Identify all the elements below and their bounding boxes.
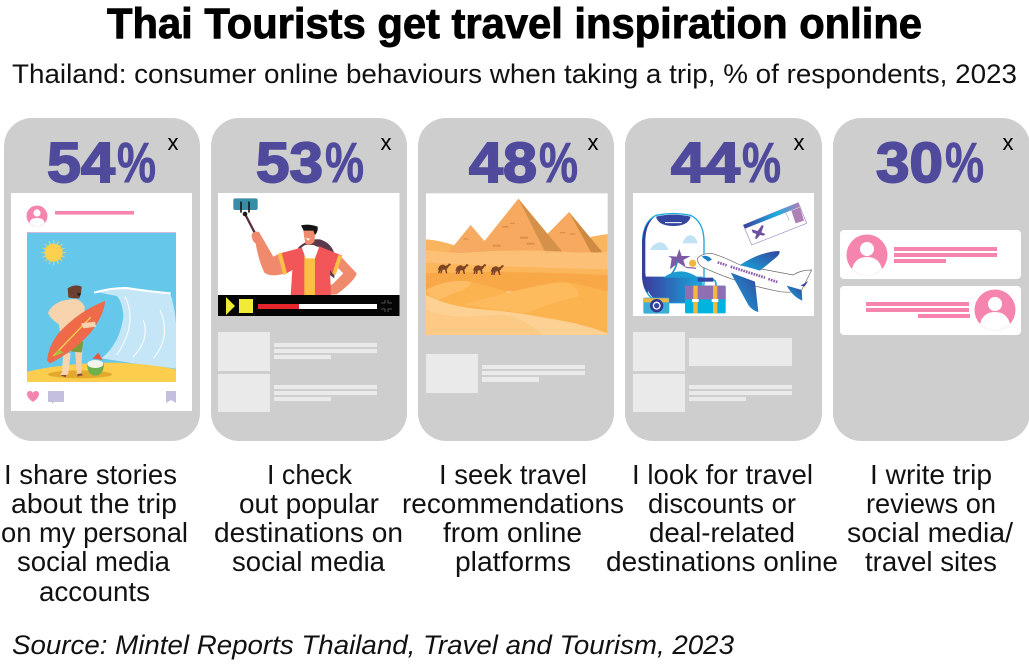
caption: share stories: I share stories xyxy=(4,459,177,490)
panel: trip reviews (30%) xyxy=(833,118,1029,441)
caption: trip reviews xyxy=(847,459,1013,577)
social post card xyxy=(11,193,192,411)
plane ticket xyxy=(743,203,807,245)
selfie traveller xyxy=(233,198,357,295)
desert pyramid image xyxy=(426,193,608,335)
caption: share stories: accounts xyxy=(39,576,150,607)
post action icons xyxy=(27,391,176,404)
caption: trip reviews: social media/ xyxy=(847,517,1013,548)
caption: travel discounts: discounts or xyxy=(648,488,796,519)
stat: 44%: 44 xyxy=(671,131,740,195)
panel: travel recommendations (48%) xyxy=(418,118,614,441)
suitcase xyxy=(685,278,726,313)
multiplier mark: x xyxy=(794,130,804,155)
subtitle: Thailand: consumer online behaviours when taking a trip, % of respondents, 2023 xyxy=(12,59,1017,89)
caption: travel recommendations xyxy=(402,459,624,577)
stat: 30%: 30 xyxy=(876,131,943,195)
stat: 44%: % xyxy=(742,131,781,195)
caption: share stories: about the trip xyxy=(11,488,177,519)
caption: travel discounts: deal-related xyxy=(649,517,795,548)
caption: travel recommendations: from online xyxy=(443,517,582,548)
caption: trip reviews: travel sites xyxy=(865,546,997,577)
placeholder list xyxy=(426,354,585,393)
caption: share stories: social media xyxy=(17,546,171,577)
placeholder list xyxy=(218,332,377,412)
panel: popular destinations (53%) xyxy=(211,118,407,441)
travel collage xyxy=(633,193,814,316)
caption: travel discounts xyxy=(606,459,838,577)
caption: travel recommendations: platforms xyxy=(455,546,571,577)
caption: popular destinations: destinations on xyxy=(214,517,403,548)
source note: Source: Mintel Reports Thailand, Travel and Tourism, 2023 xyxy=(12,630,734,660)
caption: share stories xyxy=(1,459,188,607)
caption: travel discounts: destinations online xyxy=(606,546,838,577)
video player card xyxy=(218,193,400,316)
panel: travel discounts (44%) xyxy=(625,118,822,441)
review card 2 xyxy=(840,286,1021,335)
airplane window xyxy=(642,213,704,303)
review card 1 xyxy=(840,230,1021,279)
stat: 53%: 53 xyxy=(256,131,323,195)
caption: popular destinations xyxy=(214,459,403,577)
multiplier mark: x xyxy=(588,130,598,155)
camera xyxy=(643,298,669,314)
stat: 48%: 48 xyxy=(469,131,537,195)
stat: 54%: 54 xyxy=(47,131,115,195)
multiplier mark: x xyxy=(1002,130,1014,155)
stat: 54%: % xyxy=(117,131,156,195)
beach photo xyxy=(27,233,176,382)
caption: trip reviews: I write trip xyxy=(870,459,992,490)
stat: 48%: % xyxy=(539,131,578,195)
placeholder list xyxy=(633,332,792,412)
panel: share stories (54%) xyxy=(4,118,200,441)
caption: popular destinations: I check xyxy=(267,459,352,490)
title: Thai Tourists get travel inspiration online xyxy=(107,0,922,48)
caption: popular destinations: out popular xyxy=(239,488,379,519)
caption: share stories: on my personal xyxy=(1,517,188,548)
multiplier mark: x xyxy=(380,130,392,155)
caption: travel discounts: I look for travel xyxy=(632,459,813,490)
caption: popular destinations: social media xyxy=(232,546,386,577)
caption: travel recommendations: recommendations xyxy=(402,488,624,519)
multiplier mark: x xyxy=(168,130,178,155)
airplane xyxy=(697,251,812,312)
caption: trip reviews: reviews on xyxy=(866,488,996,519)
player controls xyxy=(218,295,400,316)
stat: 53%: % xyxy=(325,131,364,195)
stat: 30%: % xyxy=(945,131,984,195)
caption: travel recommendations: I seek travel xyxy=(439,459,587,490)
